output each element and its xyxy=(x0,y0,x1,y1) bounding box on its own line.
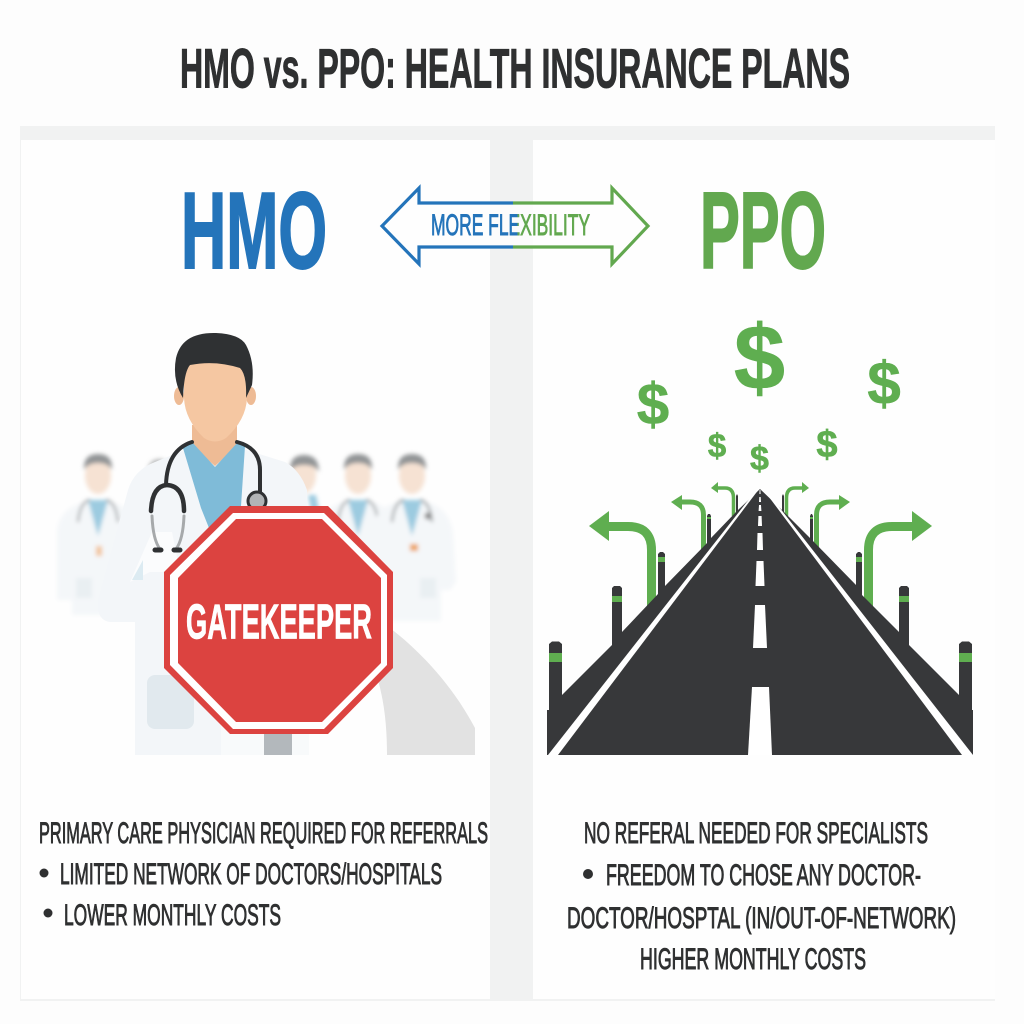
dollar signs xyxy=(637,307,901,478)
stop sign: gatekeeper xyxy=(164,506,393,734)
white coat xyxy=(98,447,308,755)
HMO bullet list: LIMITED NETWORK OF DOCTORS/HOSPITALS xyxy=(60,858,442,891)
centre dashes xyxy=(748,490,772,755)
sign post xyxy=(264,730,292,755)
road xyxy=(547,489,973,755)
gray curved shape behind sign xyxy=(378,628,475,755)
background doctors, blurred xyxy=(57,454,456,621)
dollar signs: $ xyxy=(867,350,901,417)
neck and face xyxy=(192,425,237,466)
HMO bullet list: LOWER MONTHLY COSTS xyxy=(64,899,281,932)
hair xyxy=(175,333,253,398)
ears xyxy=(174,387,184,405)
post bands xyxy=(549,517,972,662)
illustration: open road with dollars xyxy=(547,307,973,755)
main doctor xyxy=(98,333,309,755)
arrow: more flexibility xyxy=(382,188,648,264)
illustration: doctors with gatekeeper sign xyxy=(57,333,475,755)
panel: HMO xyxy=(21,140,490,999)
dollar signs: $ xyxy=(816,424,838,466)
dollar signs: $ xyxy=(708,427,726,464)
dollar signs: $ xyxy=(734,307,785,409)
PPO bullet list: HIGHER MONTHLY COSTS xyxy=(640,943,866,976)
HMO bullet list: PRIMARY CARE PHYSICIAN REQUIRED FOR REFERRALS xyxy=(39,817,488,850)
heading: PPO: PPO xyxy=(700,170,826,292)
dollar signs: $ xyxy=(750,440,769,478)
panel: PPO xyxy=(533,140,995,999)
PPO bullet list xyxy=(567,817,956,976)
heading: HMO: HMO xyxy=(181,170,327,292)
stethoscope xyxy=(151,442,260,550)
HMO bullet list xyxy=(39,817,488,932)
stop sign: gatekeeper: GATEKEEPER xyxy=(186,596,372,650)
green branching arrows xyxy=(589,482,932,610)
arrow: more flexibility: MORE FLEXIBILITY xyxy=(431,209,590,242)
dollar signs: $ xyxy=(637,372,669,437)
pocket xyxy=(147,675,194,729)
